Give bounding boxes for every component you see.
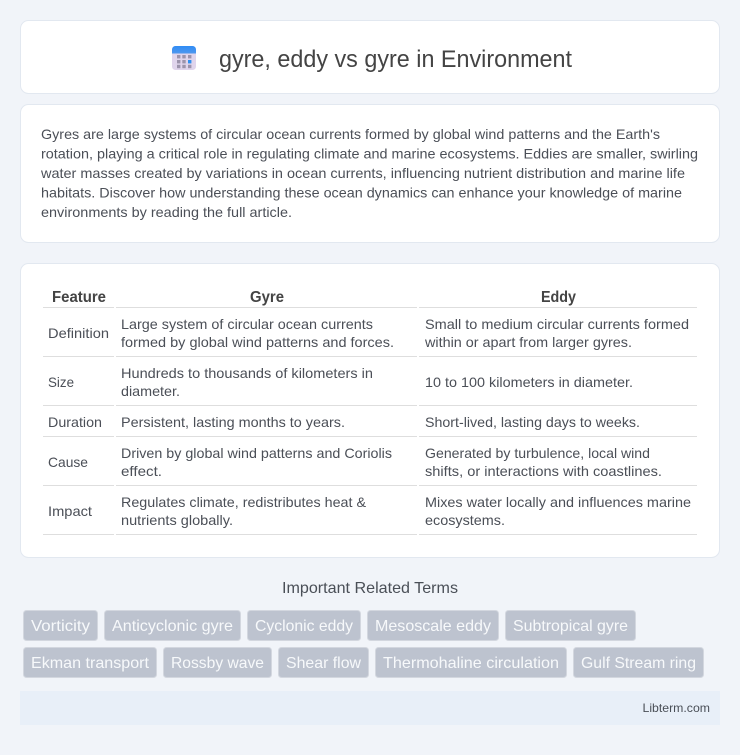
- icon: calendar: [172, 46, 196, 70]
- text block: introduction paragraph: habitats. Discover how understanding these ocean dynamics can enhance your knowledge of marine: [41, 184, 682, 200]
- row: size: [48, 365, 633, 399]
- row: impact: Mixes water locally and influences marine: [425, 494, 691, 510]
- footer credit: Libterm.com: [642, 701, 710, 715]
- table header row: Gyre: [250, 289, 284, 306]
- row: cause: Cause: [48, 454, 88, 470]
- tag: Subtropical gyre: [506, 610, 636, 640]
- row: duration: Short-lived, lasting days to weeks.: [425, 414, 640, 430]
- heading: important related terms: Important Related Terms: [282, 580, 458, 597]
- tag: Vorticity: [24, 610, 98, 640]
- panel: related term tags: [24, 610, 704, 678]
- text block: introduction paragraph: Gyres are large systems of circular ocean currents formed by global wind patterns and the Earth's: [41, 126, 660, 142]
- row: cause: shifts, or interactions with coastlines.: [425, 463, 662, 479]
- text block: introduction paragraph: water masses created by variations in ocean currents, influencing nutrient distribution and marine life: [40, 165, 685, 181]
- row: impact: Regulates climate, redistributes heat &: [121, 494, 367, 510]
- tag: Gulf Stream ring: [574, 648, 704, 678]
- panel: introduction: [20, 104, 720, 242]
- row: definition: Large system of circular ocean currents: [121, 316, 373, 332]
- row: duration: Persistent, lasting months to years.: [121, 414, 345, 430]
- tag: Rossby wave: [164, 648, 272, 678]
- tag: Ekman transport: Ekman transport: [31, 655, 150, 672]
- row: size: Hundreds to thousands of kilometers in: [121, 365, 373, 381]
- row: size: Size: [48, 374, 74, 390]
- row: impact: ecosystems.: [425, 512, 505, 528]
- tag: Mesoscale eddy: [368, 610, 498, 640]
- row: definition: [48, 316, 689, 350]
- tag: Anticyclonic gyre: [104, 610, 240, 640]
- row: definition: within or apart from larger gyres.: [424, 334, 632, 350]
- row: duration: [48, 414, 640, 430]
- tag: Rossby wave: Rossby wave: [171, 655, 264, 672]
- text block: introduction paragraph: rotation, playing a critical role in regulating climate and marine ecosystems. Eddies are smaller, swirling: [41, 146, 698, 162]
- table header row: Eddy: [541, 289, 576, 306]
- tag: Gulf Stream ring: Gulf Stream ring: [581, 655, 696, 672]
- row: definition: Definition: [48, 325, 109, 341]
- table header row: Feature: [52, 289, 106, 306]
- table header row: [52, 289, 576, 306]
- row: duration: Duration: [48, 414, 102, 430]
- row: size: diameter.: [121, 383, 180, 399]
- row: definition: Small to medium circular currents formed: [425, 316, 689, 332]
- row: definition: formed by global wind patterns and forces.: [121, 334, 394, 350]
- row: cause: [48, 445, 662, 479]
- tag: Cyclonic eddy: [248, 610, 360, 640]
- text block: introduction paragraph: environments by reading the full article.: [41, 204, 292, 220]
- tag: Thermohaline circulation: Thermohaline circulation: [383, 655, 559, 672]
- tag: Mesoscale eddy: Mesoscale eddy: [375, 618, 491, 635]
- panel: comparison table: [20, 264, 720, 558]
- tag: Anticyclonic gyre: Anticyclonic gyre: [112, 618, 233, 635]
- tag: Thermohaline circulation: [376, 648, 566, 678]
- row: cause: Driven by global wind patterns and Coriolis: [121, 445, 392, 461]
- tag: Cyclonic eddy: Cyclonic eddy: [255, 618, 353, 635]
- row: impact: nutrients globally.: [121, 512, 233, 528]
- tag: Shear flow: Shear flow: [286, 655, 361, 672]
- panel: title header: [20, 20, 720, 94]
- tag: Ekman transport: [24, 648, 156, 678]
- tag: Shear flow: [278, 648, 368, 678]
- tag: Subtropical gyre: Subtropical gyre: [513, 618, 628, 635]
- row: cause: effect.: [121, 463, 162, 479]
- row: size: 10 to 100 kilometers in diameter.: [425, 374, 633, 390]
- title: gyre, eddy vs gyre in Environment: [219, 46, 572, 73]
- row: impact: Impact: [48, 503, 92, 519]
- tag: Vorticity: Vorticity: [31, 618, 90, 635]
- row: impact: [48, 494, 691, 528]
- footer: [20, 691, 720, 725]
- text block: introduction paragraph: [40, 126, 698, 220]
- row: cause: Generated by turbulence, local wind: [425, 445, 650, 461]
